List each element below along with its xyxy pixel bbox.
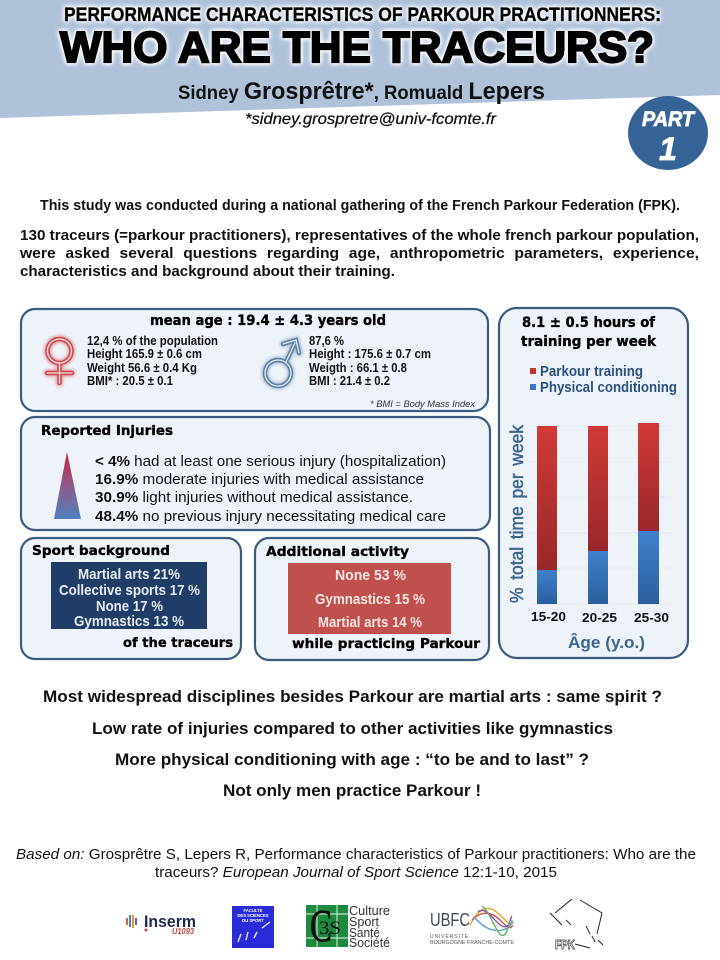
logo: Inserm: Inserm (144, 912, 196, 931)
female statistics: 12,4 % of the population (87, 334, 218, 348)
panel: sport background (21, 538, 241, 659)
activity list box: Martial arts 14 % (318, 614, 422, 631)
injury list (95, 453, 446, 525)
bar 20-25 (588, 426, 608, 604)
logo: FPK (550, 899, 603, 952)
panel heading: training per week (521, 334, 657, 350)
legend: Parkour training (540, 364, 643, 380)
panel heading: Reported Injuries (41, 424, 173, 439)
panel heading: mean age : 19.4 ± 4.3 years old (150, 313, 386, 329)
logo: faculty of sport sciences (232, 906, 274, 948)
main title: WHO ARE THE TRACEURS? (60, 23, 654, 72)
panel: training per week (499, 308, 688, 658)
reference: traceurs? European Journal of Sport Science 12:1-10, 2015 (155, 864, 557, 881)
injury list: 16.9% moderate injuries with medical assistance (95, 471, 424, 488)
intro paragraph: were asked several questions regarding age, anthropometric parameters, experience, (19, 246, 699, 262)
logo: faculty of sport sciences: DU SPORT (242, 918, 264, 923)
logo: C3S Culture Sport Santé Société: 3S (319, 918, 341, 939)
male statistics: Weigth : 66.1 ± 0.8 (309, 361, 407, 375)
male statistics: 87,6 % (309, 334, 344, 348)
female statistics: Height 165.9 ± 0.6 cm (87, 347, 202, 361)
reference (16, 846, 696, 881)
logo: C3S Culture Sport Santé Société: Société (349, 936, 390, 950)
panel heading (521, 315, 657, 350)
injury list: 30.9% light injuries without medical assistance. (95, 489, 413, 506)
badge: part 1: PART (642, 108, 696, 131)
subtitle line: PERFORMANCE CHARACTERISTICS OF PARKOUR PRACTITIONNERS: (64, 5, 661, 26)
conclusions: Low rate of injuries compared to other activities like gymnastics (92, 719, 613, 738)
male statistics: BMI : 21.4 ± 0.2 (309, 374, 390, 388)
male statistics: Height : 175.6 ± 0.7 cm (309, 347, 431, 361)
BMI footnote: * BMI = Body Mass Index (370, 399, 476, 409)
female statistics (87, 334, 218, 388)
icon: severity triangle (54, 452, 81, 519)
badge: part 1: 1 (659, 131, 677, 167)
conclusions: More physical conditioning with age : “to be and to last” ? (115, 750, 589, 769)
activity list box (288, 563, 451, 634)
logo: UBFC (430, 906, 515, 946)
reference: Based on: Grosprêtre S, Lepers R, Performance characteristics of Parkour practitioners: Who are the (16, 846, 696, 863)
logo: UBFC: UBFC (430, 910, 470, 930)
logo: C3S Culture Sport Santé Société (306, 900, 390, 951)
panel: mean age and sex (21, 309, 488, 411)
legend (530, 364, 677, 396)
intro paragraph: 130 traceurs (=parkour practitioners), representatives of the whole french parkour population, (20, 228, 699, 244)
logo: C3S Culture Sport Santé Société: Culture (349, 904, 390, 918)
email: *sidney.grospretre@univ-fcomte.fr (245, 111, 497, 128)
authors: Sidney Grosprêtre*, Romuald Lepers (178, 78, 545, 105)
header band (0, 0, 720, 118)
logo: Inserm (126, 912, 196, 936)
logo: C3S Culture Sport Santé Société: Sport (349, 915, 380, 929)
sport list box: Collective sports 17 % (59, 582, 200, 599)
intro paragraph: characteristics and background about their training. (20, 264, 395, 280)
logo: FPK: FPK (555, 937, 575, 952)
panel: reported injuries (21, 417, 490, 530)
legend: Physical conditioning (540, 380, 677, 396)
male statistics (309, 334, 431, 388)
y axis label: % total time per week (507, 424, 527, 603)
sport list box: None 17 % (96, 598, 163, 615)
conclusions (43, 687, 662, 800)
sport list box: Gymnastics 13 % (74, 613, 184, 630)
logo: faculty of sport sciences: DES SCIENCES (237, 913, 269, 918)
logo: UBFC: UNIVERSITE (430, 934, 469, 940)
logo: Inserm: U1093 (172, 927, 195, 936)
female statistics: BMI* : 20.5 ± 0.1 (87, 374, 173, 388)
sport list box (51, 562, 207, 630)
caption: of the traceurs (123, 635, 233, 651)
conclusions: Not only men practice Parkour ! (223, 781, 481, 800)
bar 15-20 (537, 426, 557, 604)
intro paragraph (19, 228, 699, 280)
badge: part 1 (628, 96, 708, 170)
x axis labels: 15-20 (531, 609, 566, 624)
icon: female symbol (47, 339, 72, 383)
logo: UBFC: BOURGOGNE FRANCHE-COMTE (430, 940, 515, 946)
female statistics: Weight 56.6 ± 0.4 Kg (87, 361, 197, 375)
sport list box: Martial arts 21% (78, 566, 180, 583)
icon: male symbol (265, 340, 299, 386)
logo: C3S Culture Sport Santé Société: Santé (349, 926, 380, 940)
caption: while practicing Parkour (292, 636, 480, 652)
conclusions: Most widespread disciplines besides Parkour are martial arts : same spirit ? (43, 687, 662, 706)
bar 25-30 (638, 423, 659, 604)
x axis title: Âge (y.o.) (568, 633, 645, 652)
title (60, 5, 661, 72)
activity list box: Gymnastics 15 % (315, 591, 425, 608)
panel heading: 8.1 ± 0.5 hours of (522, 315, 656, 331)
x axis labels: 20-25 (582, 610, 617, 625)
activity list box: None 53 % (335, 567, 406, 584)
stacked bar chart (507, 423, 672, 652)
logo: C3S Culture Sport Santé Société: C (310, 900, 332, 951)
injury list: < 4% had at least one serious injury (hospitalization) (95, 453, 446, 470)
logo: faculty of sport sciences: FACULTE (244, 908, 263, 913)
panel: additional activity (255, 538, 489, 660)
injury list: 48.4% no previous injury necessitating medical care (95, 508, 446, 525)
x axis labels (531, 609, 669, 625)
panel heading: Additional activity (266, 544, 409, 560)
panel heading: Sport background (32, 543, 170, 559)
intro sentence: This study was conducted during a national gathering of the French Parkour Federation (FPK). (40, 198, 680, 214)
x axis labels: 25-30 (634, 610, 669, 625)
